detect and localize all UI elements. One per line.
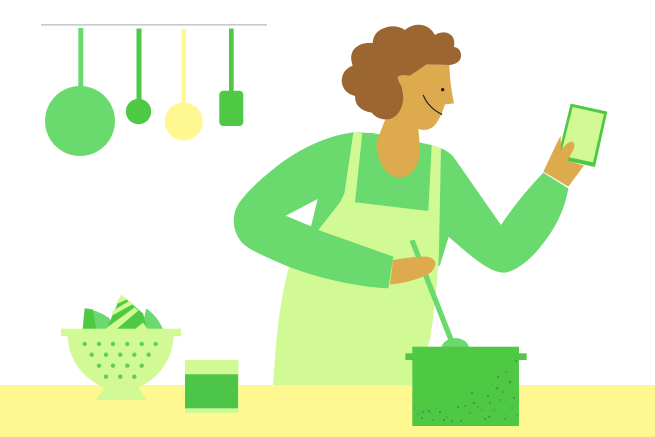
left hand — [390, 256, 436, 284]
colander with dumplings — [61, 295, 181, 400]
person — [234, 25, 607, 385]
icon: hanging spatula — [219, 28, 243, 126]
icon: large hanging pan — [45, 28, 115, 156]
torso — [340, 132, 460, 300]
pot speckles — [414, 360, 518, 422]
colander bowl — [67, 334, 174, 392]
icon: yellow hanging ladle — [165, 29, 203, 140]
colander rim — [61, 329, 181, 336]
left arm sleeve — [234, 132, 393, 288]
icon: small hanging ladle — [126, 28, 151, 124]
table — [0, 385, 655, 437]
ear — [397, 75, 410, 92]
eye — [441, 88, 444, 91]
hanging utensil rail — [41, 24, 267, 26]
hair — [342, 25, 461, 119]
armpit gap — [286, 199, 318, 226]
colander foot — [96, 385, 147, 400]
neck and face — [376, 64, 454, 178]
apron — [273, 132, 441, 385]
dumplings — [83, 295, 163, 329]
spoon — [410, 240, 469, 347]
right arm — [440, 148, 568, 273]
phone — [559, 104, 607, 167]
cup of green drink — [185, 360, 238, 413]
colander holes — [82, 342, 158, 379]
right hand — [543, 136, 584, 187]
pot — [405, 347, 527, 426]
smile — [423, 95, 442, 114]
head, neck, hair and phone hand — [342, 25, 607, 187]
